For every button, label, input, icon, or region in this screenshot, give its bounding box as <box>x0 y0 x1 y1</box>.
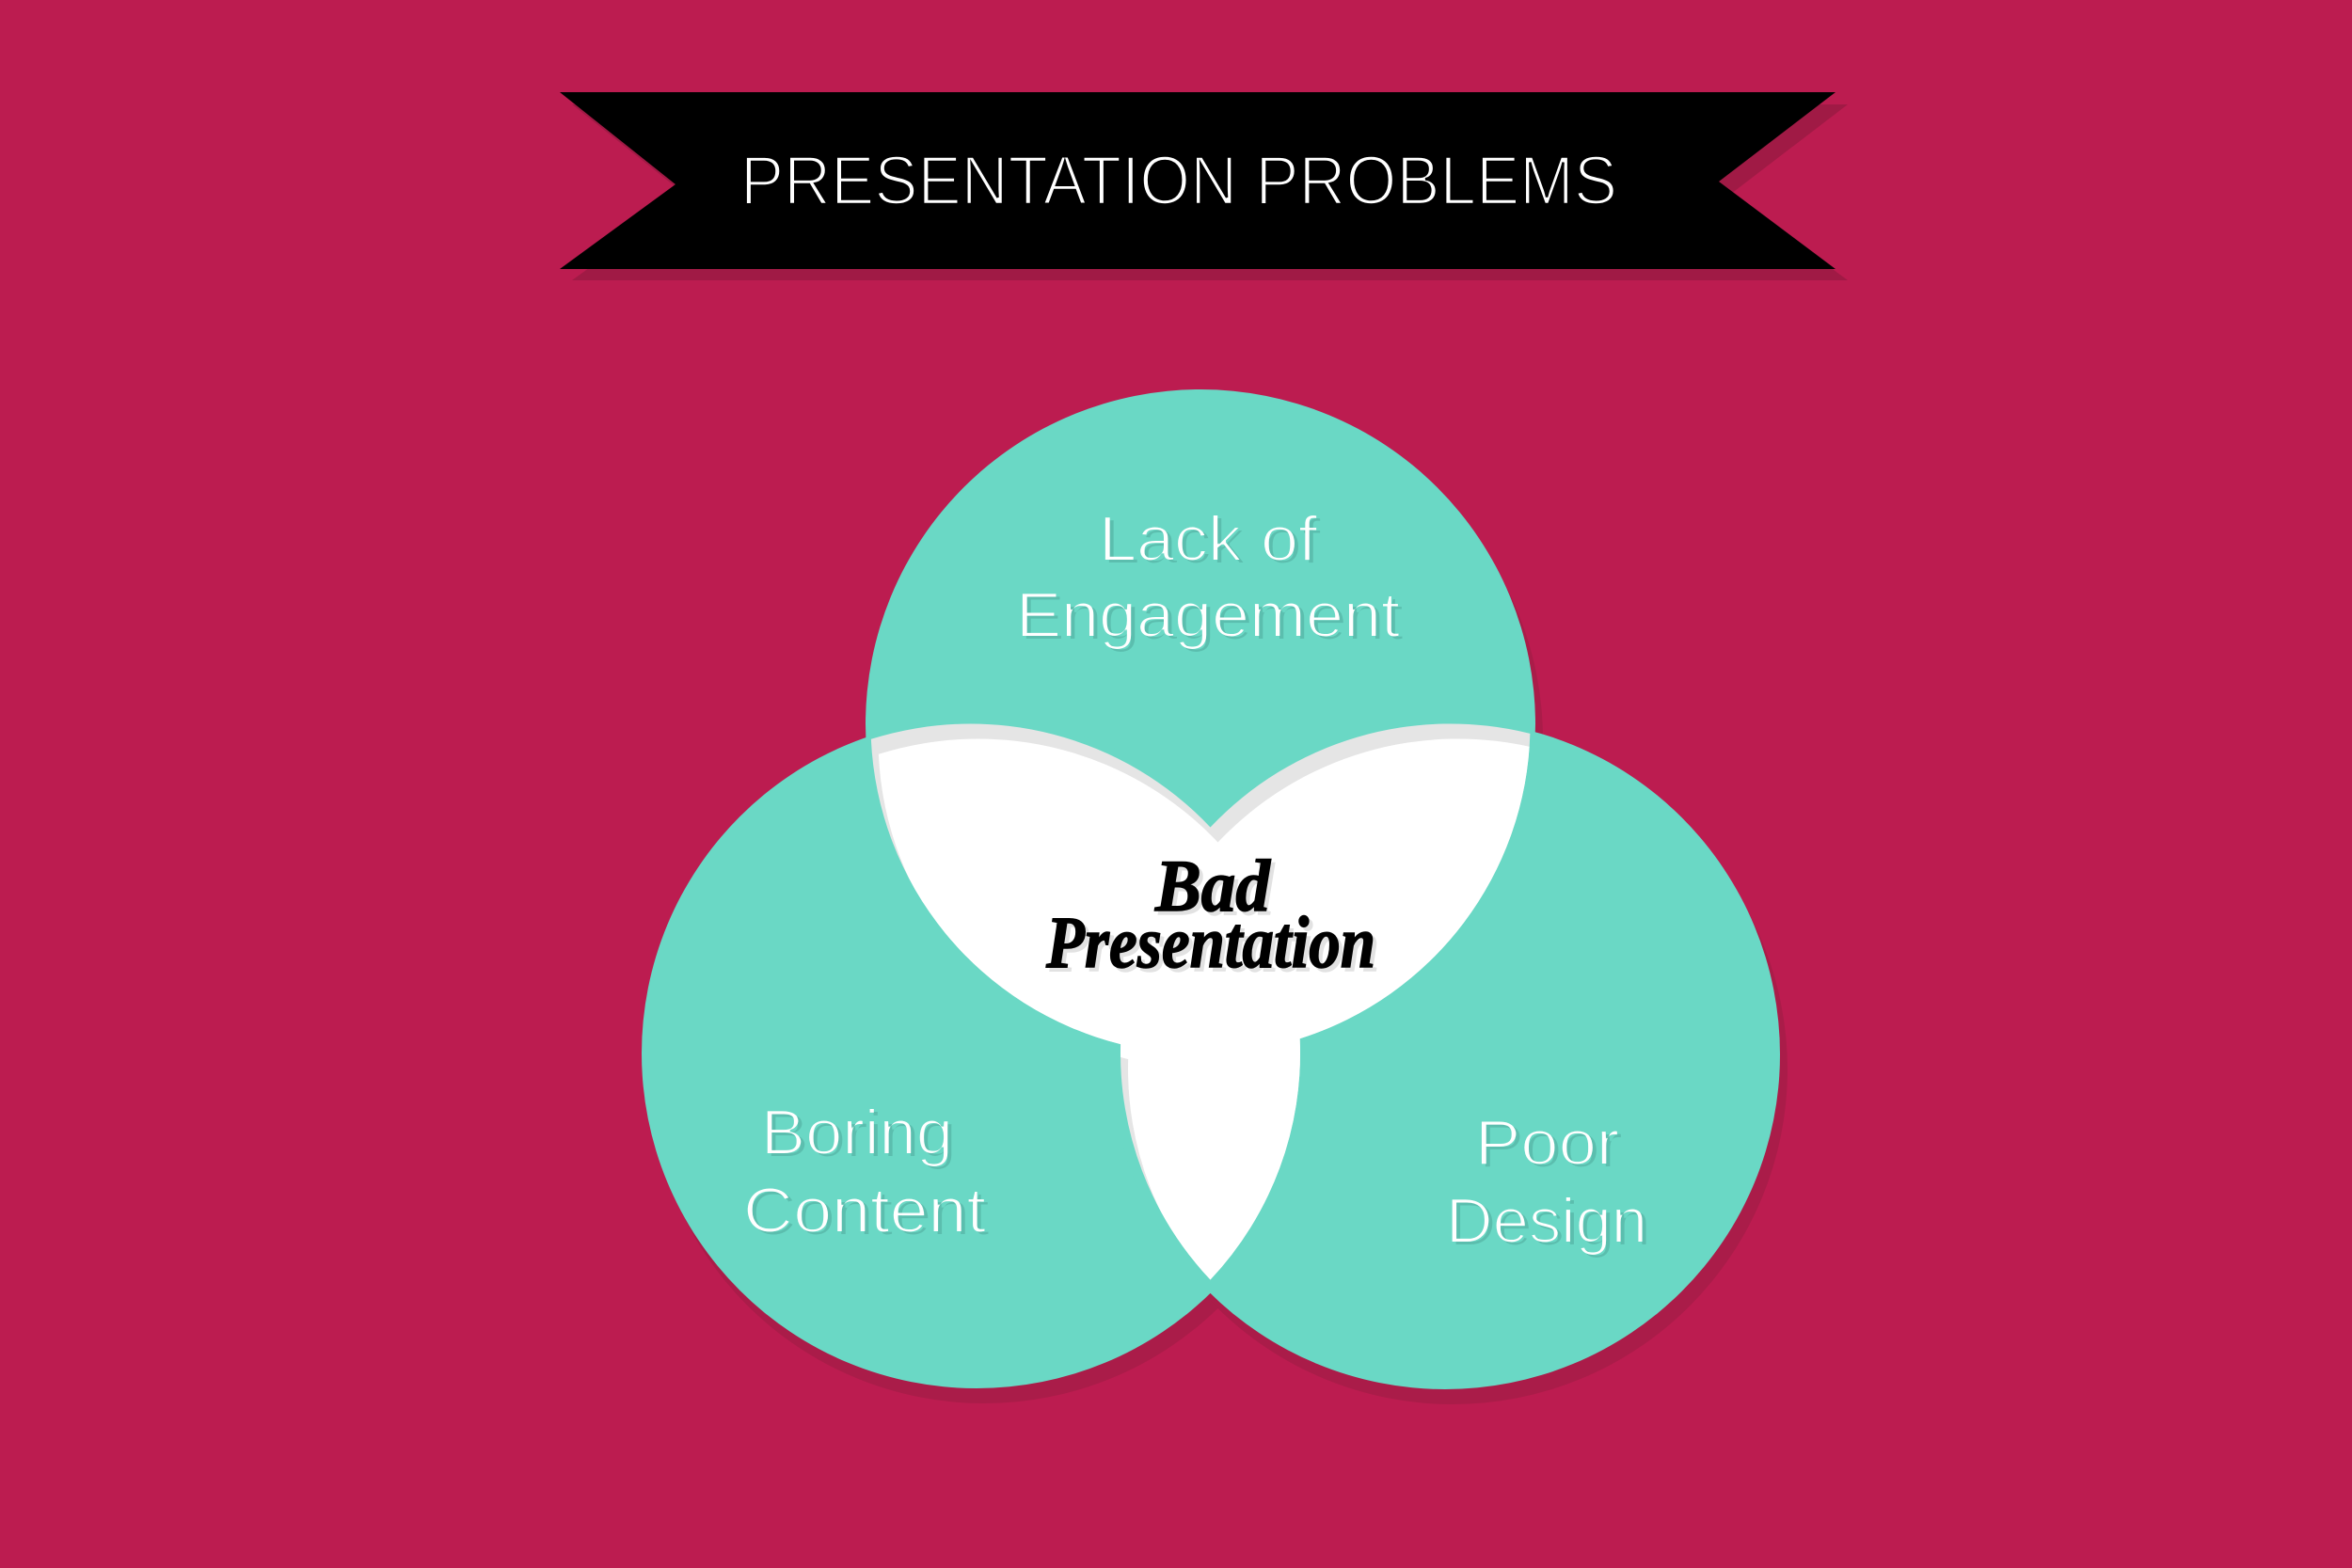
label: boring content: Boring <box>761 1097 953 1168</box>
circle: boring content <box>642 719 1311 1388</box>
centre label: bad presentation: Bad <box>1154 845 1271 927</box>
centre label: bad presentation <box>1045 845 1375 983</box>
label: lack of engagement: Lack of <box>1099 503 1317 575</box>
circle: lack of engagement <box>866 389 1535 1059</box>
label: boring content <box>743 1097 986 1246</box>
label: poor design: Poor <box>1475 1107 1619 1179</box>
title: PRESENTATION PROBLEMS <box>740 143 1617 219</box>
label: poor design: Design <box>1446 1185 1647 1257</box>
centre overlap: grey inner shadow <box>871 723 1530 1279</box>
label: lack of engagement: Engagement <box>1016 579 1400 651</box>
venn diagram <box>642 389 1788 1404</box>
label: poor design <box>1446 1107 1647 1257</box>
banner shadow <box>572 104 1848 280</box>
label: boring content: Content <box>743 1175 986 1246</box>
centre label: bad presentation: Presentation <box>1045 901 1375 983</box>
centre overlap: white fill <box>879 738 1537 1294</box>
circle shadows <box>649 404 1788 1404</box>
title banner <box>560 92 1848 280</box>
label: lack of engagement <box>1016 503 1400 651</box>
banner ribbon <box>560 92 1836 269</box>
circle: poor design <box>1110 720 1780 1389</box>
